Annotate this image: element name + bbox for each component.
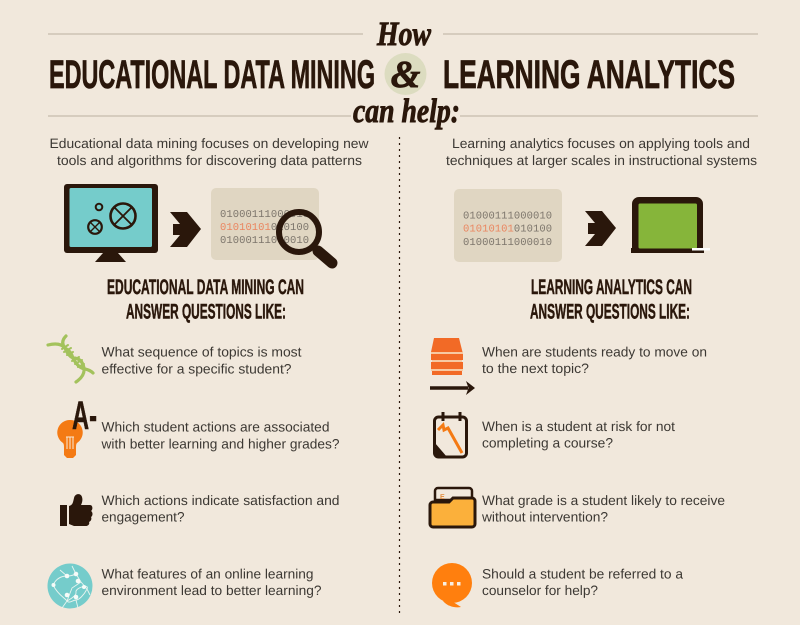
- left question 4: What features of an online learning: [102, 566, 314, 582]
- right question 2: When is a student at risk for not: [482, 419, 675, 434]
- icon: monitor with gears: [64, 184, 158, 262]
- left intro text: Educational data mining focuses on developing new: [50, 136, 369, 151]
- icon: magnifier: [279, 212, 332, 263]
- title words: can help: can help:: [353, 93, 460, 130]
- left heading: EDUCATIONAL DATA MINING CAN: [107, 276, 304, 299]
- data card: [454, 189, 562, 262]
- icon: folder: E: [440, 494, 445, 501]
- left question 2: Which student actions are associated: [102, 420, 330, 434]
- left question 2: with better learning and higher grades?: [100, 436, 340, 451]
- right question 1: When are students ready to move on: [482, 345, 707, 360]
- right question 4: counselor for help?: [482, 583, 598, 598]
- title: educational data mining: EDUCATIONAL DATA MINING: [49, 53, 375, 97]
- icon: network globe: [48, 564, 92, 608]
- icon: lightbulb with A- grade: A-: [72, 394, 97, 438]
- left heading: [107, 276, 304, 324]
- left question 4: environment lead to better learning?: [102, 583, 322, 598]
- right question 3: What grade is a student likely to receive: [482, 493, 725, 508]
- right question 1: to the next topic?: [482, 361, 589, 376]
- left question 2: [100, 420, 340, 451]
- left question 3: Which actions indicate satisfaction and: [102, 493, 340, 508]
- icon: thumbs up: [60, 494, 92, 526]
- right question 3: without intervention?: [481, 510, 608, 524]
- right question 1: [482, 345, 707, 376]
- icon: lightbulb with A- grade: [57, 394, 97, 458]
- icon: folder: [430, 488, 475, 527]
- left question 4: [102, 566, 322, 598]
- icon: clipboard with chart: [434, 412, 466, 457]
- left question 3: engagement?: [102, 510, 185, 525]
- icon: DNA helix: [48, 336, 93, 382]
- data card: 01000111000010: [463, 237, 552, 249]
- ampersand badge: [384, 53, 426, 96]
- icon: speech bubble: [432, 563, 472, 607]
- left question 1: What sequence of topics is most: [102, 345, 302, 360]
- title: [49, 16, 735, 130]
- right question 4: Should a student be referred to a: [482, 566, 683, 582]
- arrow: left: [170, 212, 201, 247]
- left question 3: [102, 493, 340, 525]
- data card: 01000111000010: [463, 210, 552, 222]
- left question 1: effective for a specific student?: [102, 361, 292, 376]
- right intro text: [446, 136, 757, 168]
- data card with magnifier: [211, 188, 332, 263]
- icon: books with arrow: [430, 338, 475, 395]
- left intro text: [50, 136, 369, 168]
- right intro text: Learning analytics focuses on applying tools and: [452, 136, 750, 151]
- data card: 01010101010100: [463, 224, 552, 236]
- left question 1: [102, 345, 302, 376]
- right intro text: techniques at larger scales in instructional systems: [446, 153, 757, 168]
- icon: laptop: [631, 197, 710, 253]
- left heading: ANSWER QUESTIONS LIKE:: [126, 300, 286, 324]
- data card with magnifier: 01010101010100: [220, 222, 309, 234]
- title word: How: How: [376, 16, 431, 53]
- right heading: [530, 276, 692, 324]
- data card with magnifier: 01000111000010: [220, 235, 309, 247]
- right question 2: [482, 419, 675, 450]
- right question 2: completing a course?: [482, 436, 613, 450]
- right question 3: [481, 493, 725, 524]
- arrow: right: [585, 211, 616, 246]
- right question 4: [482, 566, 683, 598]
- data card with magnifier: 01000111000010: [220, 209, 309, 221]
- ampersand badge: &: [391, 54, 421, 96]
- left intro text: tools and algorithms for discovering data patterns: [57, 153, 362, 168]
